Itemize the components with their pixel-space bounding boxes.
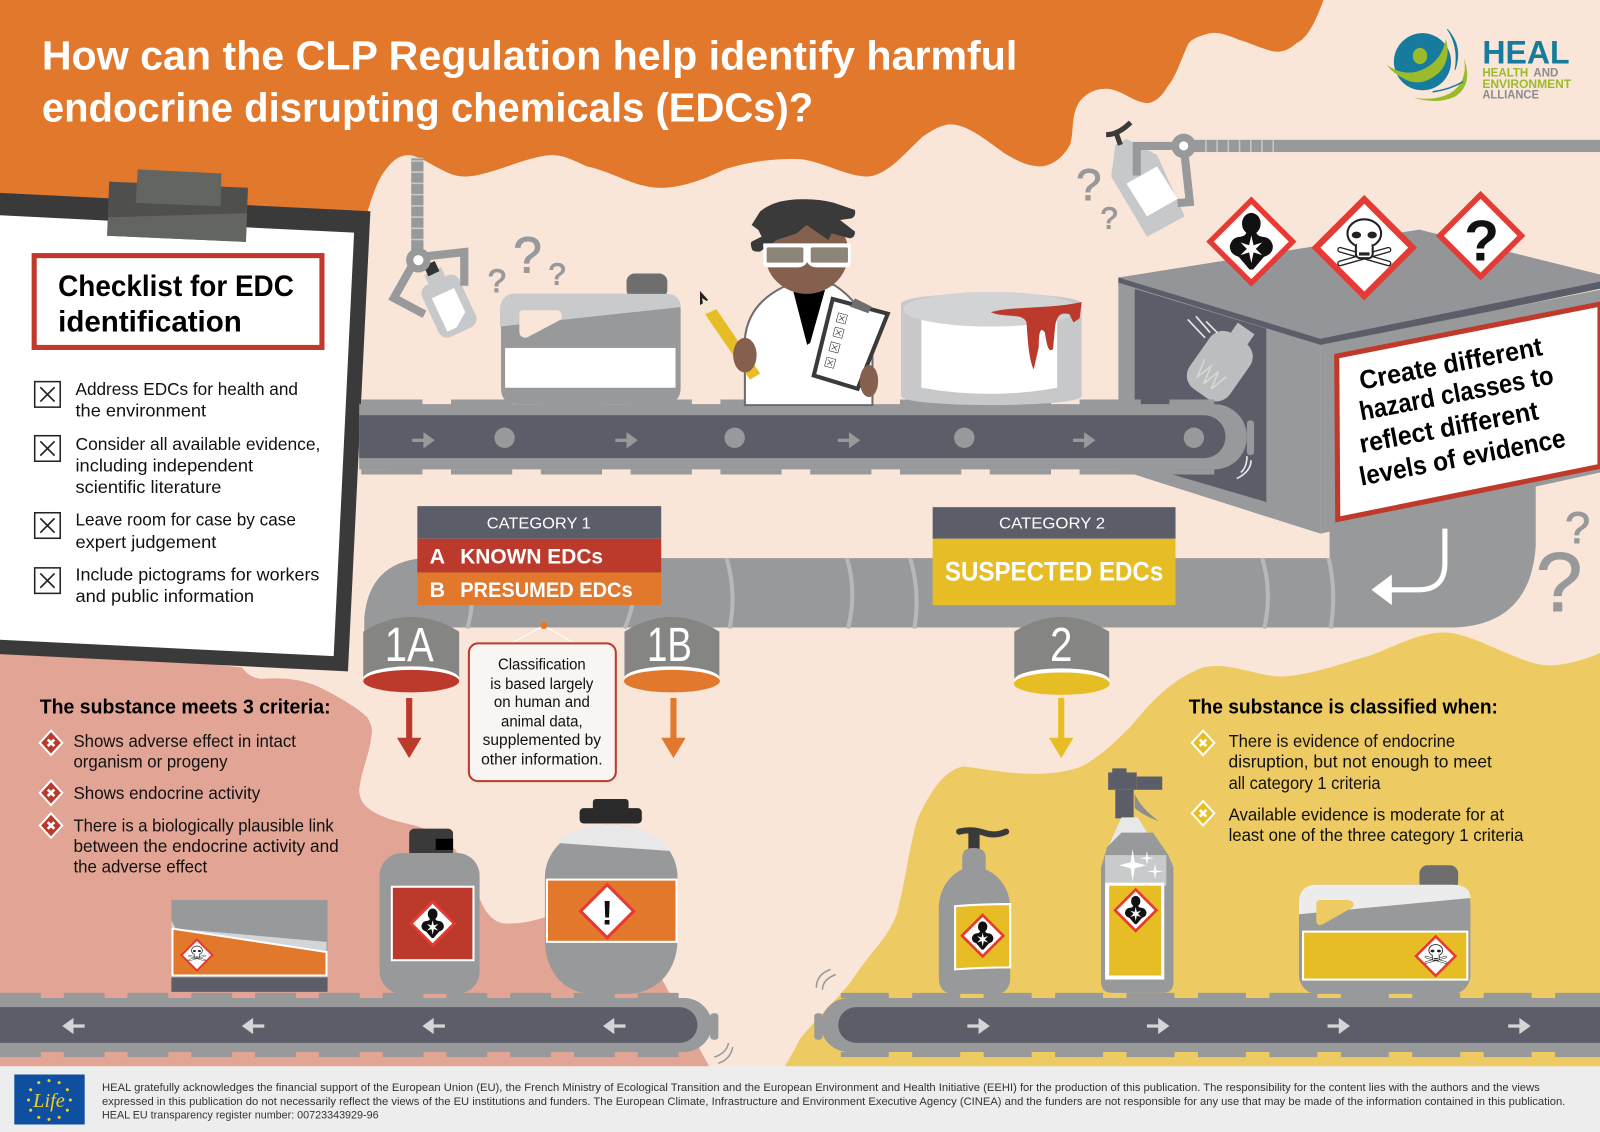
text block: category 1 criteria: between the endocrine activity and [73, 836, 339, 856]
pink left background shape [0, 643, 709, 1066]
crane arm left with bottle [394, 158, 480, 341]
text block: category 1 criteria: the adverse effect [73, 856, 207, 876]
callout: classification: supplemented by [483, 732, 601, 749]
bottom right conveyor [814, 969, 1600, 1055]
checklist item 1 [35, 379, 298, 420]
text block: category 1 criteria: There is a biologically plausible link [73, 816, 334, 836]
hair [751, 199, 855, 252]
question marks right: ? [1076, 159, 1101, 210]
HEAL logo: ALLIANCE [1482, 88, 1539, 101]
checklist heading [34, 256, 322, 347]
checklist item 1: the environment [76, 400, 206, 420]
footer acknowledgement text: HEAL EU transparency register number: 00723343929-96 [102, 1109, 379, 1121]
label: category 2: CATEGORY 2 [999, 516, 1105, 533]
sign: hazard classes: levels of evidence [1357, 423, 1568, 492]
question marks left: ? [488, 262, 506, 299]
sign: hazard classes: hazard classes to [1357, 360, 1556, 426]
callout: classification [469, 622, 616, 781]
question marks left: ? [513, 226, 542, 283]
checklist heading: identification [58, 306, 242, 339]
product: pump bottle [939, 830, 1010, 994]
pipe [364, 480, 1536, 663]
checklist item 2: scientific literature [76, 477, 221, 497]
clipboard clip [107, 169, 248, 242]
checklist item 2: Consider all available evidence, [76, 434, 320, 454]
footer acknowledgement text [102, 1082, 1565, 1121]
title: How can the CLP Regulation help identify harmful [42, 32, 1017, 78]
callout: classification: is based largely [490, 676, 594, 693]
orange header wave [0, 0, 1323, 212]
hazard pictogram: health hazard [1210, 200, 1293, 283]
arrow: 1A down [397, 698, 421, 758]
nozzle 1A [363, 617, 459, 692]
product: bottle with red label [380, 829, 480, 994]
scientist clipboard [814, 298, 888, 389]
callout: classification: Classification [498, 656, 586, 673]
sign: hazard classes: Create different [1357, 331, 1545, 396]
EU Life logo [14, 1074, 85, 1124]
question marks right [1076, 159, 1590, 629]
title [42, 32, 1017, 130]
question marks left: ? [549, 258, 566, 292]
checklist heading: Checklist for EDC [58, 270, 294, 303]
falling bottle in machine [1180, 314, 1266, 479]
text block: category 2 criteria [1189, 696, 1524, 845]
callout: classification: animal data, [501, 714, 583, 731]
question marks right: ? [1565, 502, 1590, 553]
label: category 1: KNOWN EDCs [460, 544, 603, 568]
title: endocrine disrupting chemicals (EDCs)? [42, 84, 813, 130]
product: jerrycan with yellow label [1299, 865, 1470, 994]
footer strip [0, 1066, 1600, 1132]
text block: category 2 criteria: least one of the three category 1 criteria [1229, 825, 1524, 845]
text block: category 1 criteria: The substance meets 3 criteria: [40, 696, 331, 718]
paint pot [901, 292, 1082, 405]
nozzle 1B [624, 617, 720, 692]
nozzle 2: 2 [1050, 619, 1072, 672]
goggles [763, 243, 851, 267]
checklist item 4: and public information [76, 586, 254, 606]
pipe return arrow [1371, 529, 1445, 605]
HEAL logo: AND [1533, 67, 1558, 80]
product: large bottle with orange label: ! [601, 894, 613, 932]
checklist item 2: including independent [76, 455, 253, 475]
question marks right: ? [1536, 535, 1582, 629]
arrow: 1B down [661, 698, 686, 758]
question marks left [488, 226, 566, 299]
footer acknowledgement text: HEAL gratefully acknowledges the financial support of the European Union (EU), the French Ministry of Ecological Transition and the European Environment and Health Initiative (EEHI) for the production of this publication. The responsibility for the content lies with the authors and the views [102, 1082, 1540, 1094]
product: box with skull [171, 900, 328, 992]
yellow right background shape [785, 632, 1600, 1066]
checklist item 4 [35, 565, 320, 606]
product: spray bottle [1101, 768, 1173, 993]
scientist figure [700, 199, 888, 405]
label: category 1 [417, 506, 661, 605]
text block: category 1 criteria: Shows endocrine activity [73, 783, 261, 803]
checklist item 3 [35, 510, 296, 552]
hazard pictogram: question mark [1440, 195, 1521, 277]
callout: classification: on human and [494, 694, 590, 711]
label: category 2 [933, 507, 1176, 605]
checklist item 3: Leave room for case by case [76, 510, 296, 530]
label: category 1: B [430, 578, 445, 602]
text block: category 2 criteria: There is evidence of endocrine [1229, 731, 1455, 751]
checklist item 2 [35, 434, 320, 497]
text block: category 2 criteria: disruption, but not enough to meet [1229, 751, 1492, 771]
label: category 1: A [430, 544, 445, 568]
sign: hazard classes [1337, 304, 1600, 519]
hazard pictogram: skull [1316, 199, 1413, 296]
text block: category 2 criteria: The substance is classified when: [1189, 696, 1498, 718]
panel: clipboard checklist [0, 169, 370, 671]
text block: category 2 criteria: Available evidence is moderate for at [1229, 804, 1504, 824]
text block: category 2 criteria: all category 1 criteria [1229, 773, 1381, 793]
label: category 1: PRESUMED EDCs [460, 578, 633, 602]
crane arm right with bottle [1106, 122, 1600, 237]
checklist item 4: Include pictograms for workers [76, 565, 320, 585]
HEAL logo [1387, 29, 1572, 101]
callout: classification: other information. [481, 751, 603, 768]
label: category 1: CATEGORY 1 [487, 516, 591, 533]
nozzle 1A: 1A [385, 619, 434, 672]
text block: category 1 criteria: Shows adverse effect in intact [73, 731, 296, 751]
arrow: 2 down [1049, 698, 1073, 758]
question marks right: ? [1101, 202, 1118, 236]
jerrycan on top conveyor [500, 273, 681, 404]
nozzle 1B: 1B [647, 619, 692, 672]
top conveyor belt [359, 402, 1254, 472]
text block: category 1 criteria [40, 696, 339, 876]
pencil [700, 291, 760, 380]
checklist item 3: expert judgement [76, 532, 217, 552]
product: large bottle with orange label [545, 799, 678, 994]
bottom left conveyor [0, 995, 733, 1063]
HEAL logo: HEALTH [1482, 67, 1528, 80]
checklist item 1: Address EDCs for health and [76, 379, 298, 399]
HEAL logo: HEAL [1482, 33, 1570, 70]
text block: category 1 criteria: organism or progeny [73, 751, 228, 771]
HEAL logo: ENVIRONMENT [1482, 78, 1572, 91]
EU Life logo: Life [32, 1090, 65, 1112]
nozzle 2 [1014, 617, 1110, 695]
machine box [1118, 230, 1600, 534]
sign: hazard classes: reflect different [1357, 395, 1541, 459]
footer acknowledgement text: expressed in this publication do not necessarily reflect the views of the EU institutions and funders. The European Climate, Infrastructure and Environment Executive Agency (CINEA) and the funders are not responsible for any use that may be made of the information contained in this publication. [102, 1096, 1565, 1108]
hazard pictogram: question mark: ? [1464, 210, 1499, 274]
label: category 2: SUSPECTED EDCs [945, 557, 1163, 587]
